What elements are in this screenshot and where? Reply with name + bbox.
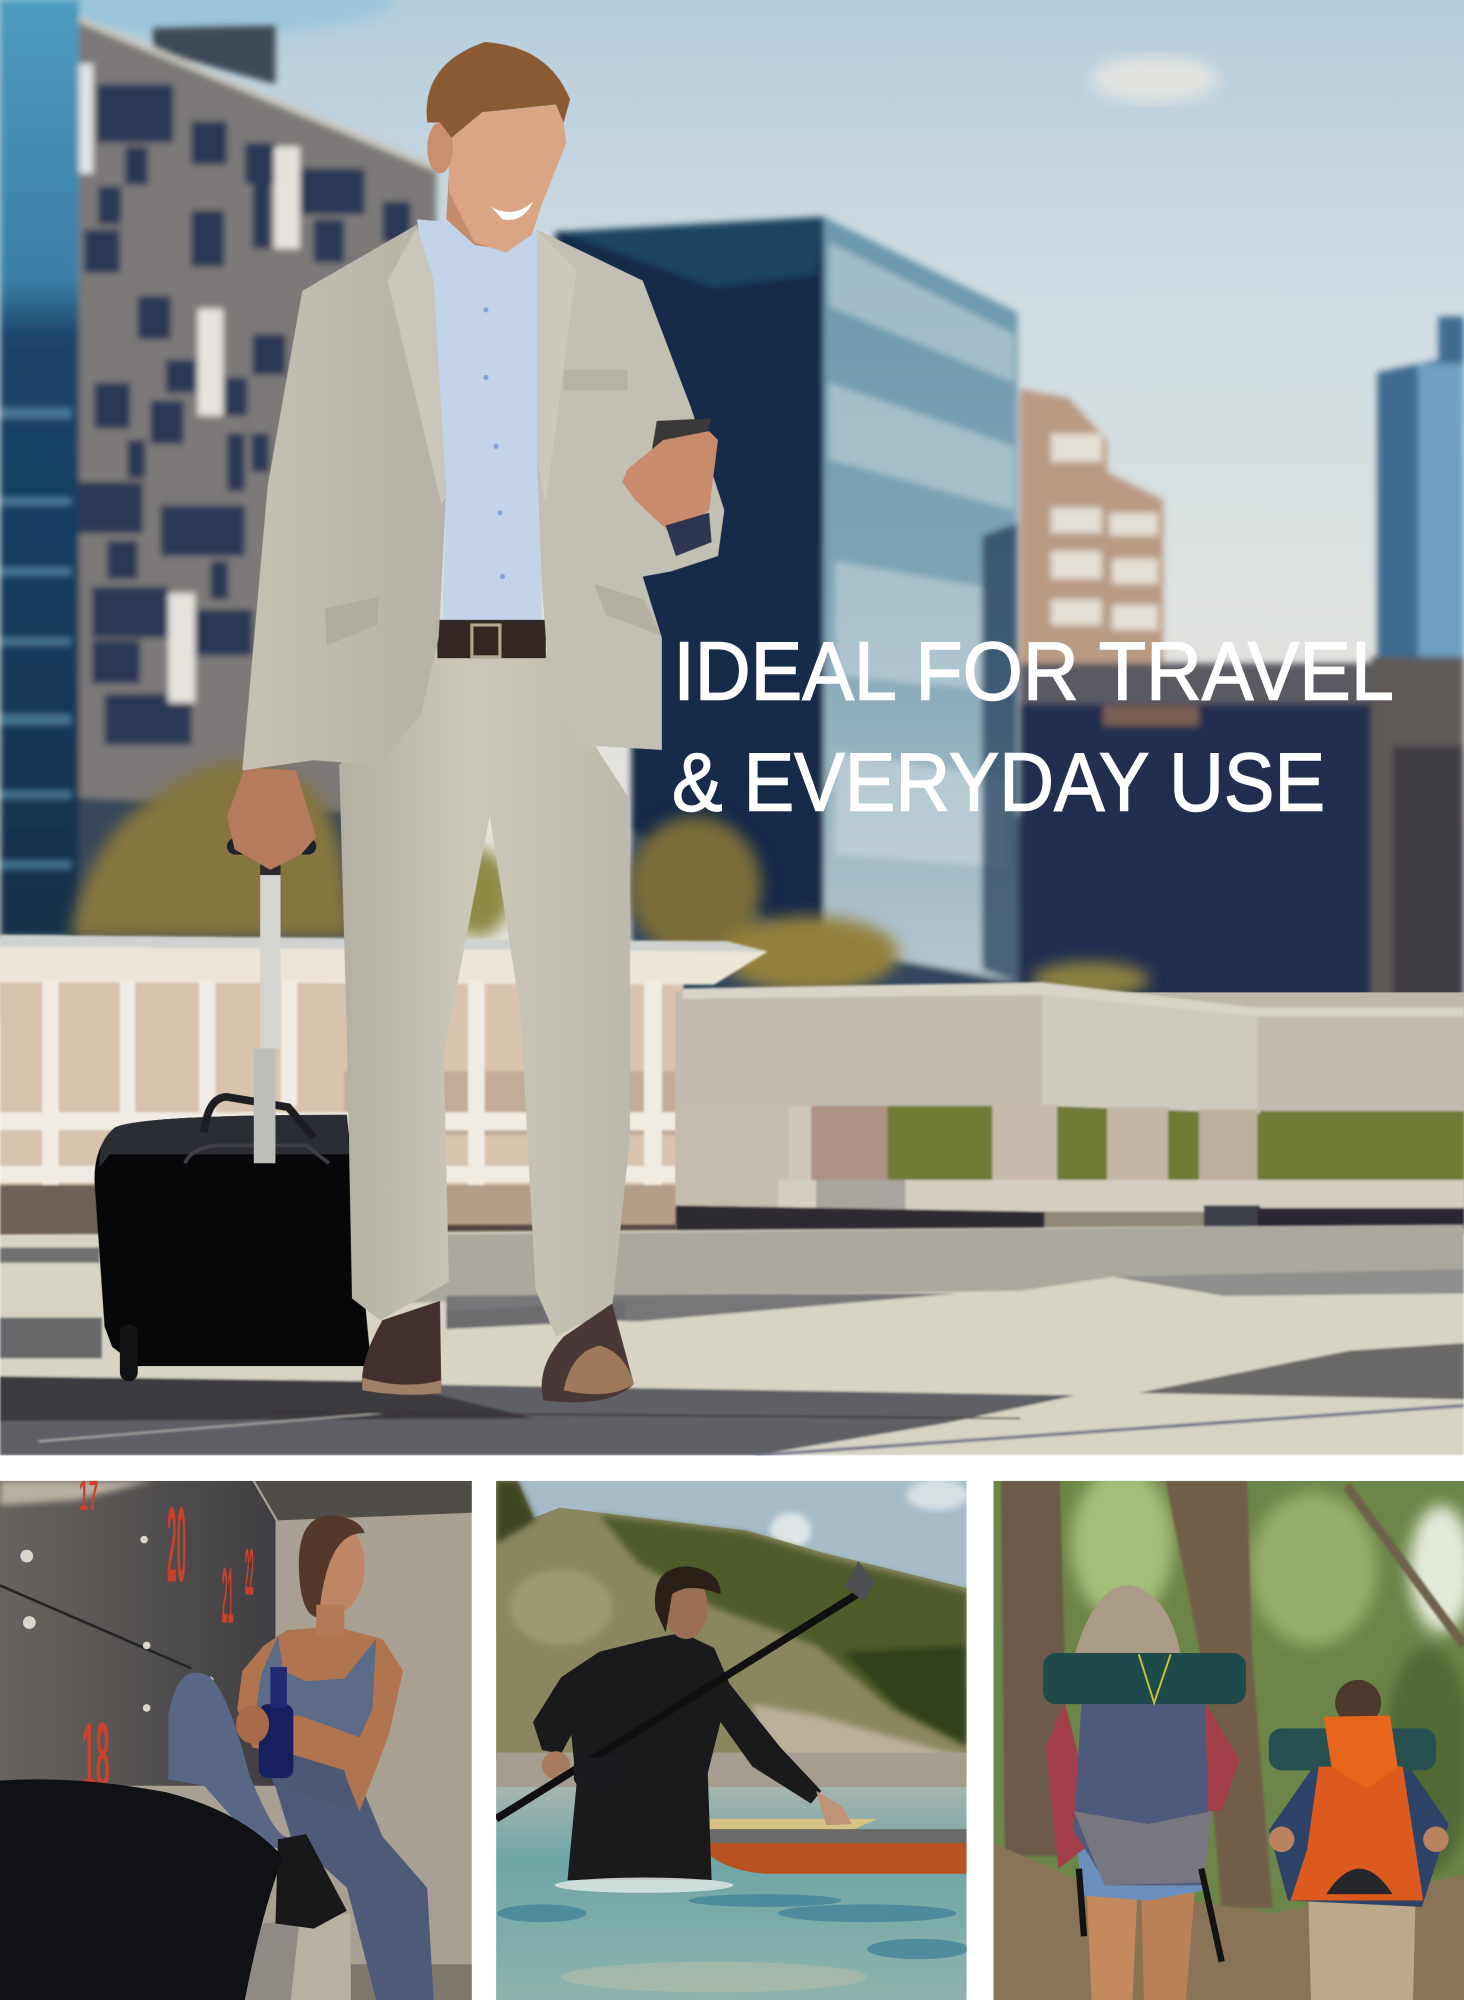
locker numbers [79,1472,254,1808]
shoes [362,1301,441,1393]
jacket left [242,224,446,770]
forest floor [993,1843,1464,2000]
city buildings [0,0,1464,1014]
woman: head and hair [304,1519,365,1614]
water [496,1787,967,2000]
beach [496,1753,967,1791]
photo panel: paddleboarder [496,1480,969,2000]
hands [542,1751,570,1779]
hero photo: businessman with suitcase [0,0,1464,1455]
forest [993,1481,1464,2000]
woman: water bottle [259,1704,293,1778]
hair [427,42,570,138]
locker numbers: 17 [79,1472,98,1520]
paddle [496,1561,875,1819]
head [664,1575,708,1639]
shirt cuff [666,513,712,556]
woman: arms and torso skin [237,1626,403,1811]
sky [496,1481,967,1634]
locker knobs [20,1536,214,1712]
woman: hand [236,1705,269,1744]
hand with phone [648,418,712,474]
lapels [388,227,446,504]
shirt [417,219,542,622]
hiker man [1269,1680,1449,2000]
hiker woman [1043,1585,1246,2000]
wall and ceiling [0,1481,472,2000]
jacket right [537,230,724,750]
paddleboard [695,1839,967,1874]
neck [446,172,516,250]
headline [672,627,1394,829]
suitcase with telescopic handle [94,838,377,1381]
left hand [227,768,316,870]
concrete wall and hedge [676,982,1464,1240]
bench [242,1913,351,2000]
trees [70,762,1149,997]
baseboard [351,1964,472,2000]
photo panel: gym locker room: 21 [222,1550,233,1639]
pavement [0,1224,1464,1455]
woman: front leg [168,1673,287,1849]
pockets [325,597,379,645]
locker numbers: 18 [82,1703,110,1808]
tree trunks [1001,1481,1464,1908]
woman: back leg [265,1754,434,2000]
hillside [496,1481,967,1786]
belt [437,620,546,658]
sky [0,0,1464,1020]
headline: IDEAL FOR TRAVEL [673,627,1394,718]
trousers [339,644,630,1337]
splash [555,1878,733,1893]
shirt buttons and placket [483,307,505,579]
photo panel: gym locker room [0,1472,472,2000]
ear [427,122,453,173]
headline: & EVERYDAY USE [672,738,1325,829]
lockers [0,1481,275,1786]
woman: waistband [261,1745,355,1811]
woman: sneaker [275,1834,347,1929]
smile [491,202,533,220]
railing behind bridge [0,935,768,1237]
woman: sports top [255,1635,376,1737]
wall backing [676,992,1464,1235]
locker numbers: 20 [167,1485,186,1605]
photo panel: gym locker room: 22 [245,1535,254,1609]
head [449,105,566,253]
black gym bag [0,1779,283,2000]
businessman [227,42,724,1402]
photo panel: backpackers in forest [993,1467,1464,2000]
wetsuit man [533,1633,821,1880]
